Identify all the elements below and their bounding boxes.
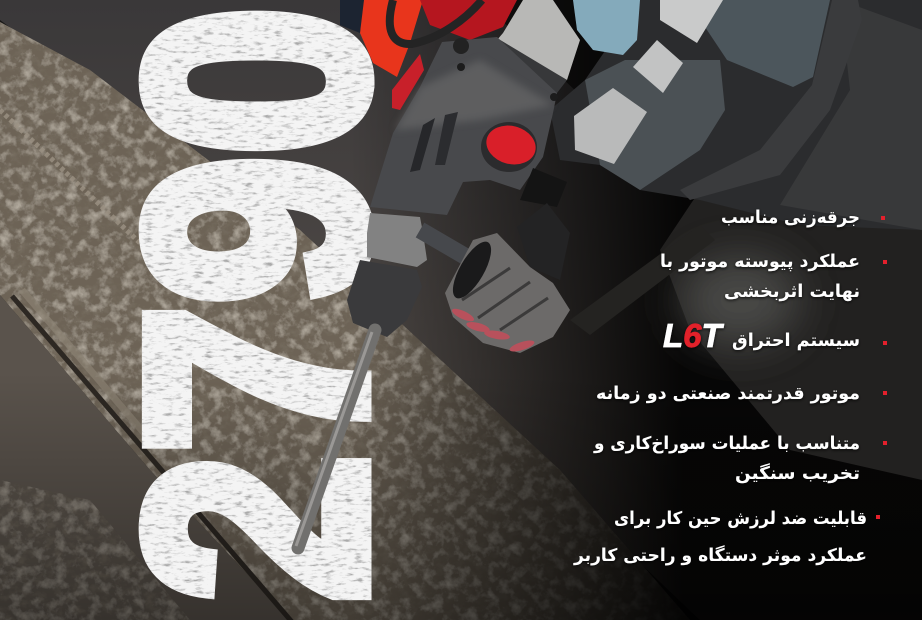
feature list (573, 208, 887, 566)
item: continuous motor performance: عملکرد پیوسته موتور با (660, 252, 860, 272)
red lever (392, 54, 424, 110)
main body (370, 37, 557, 215)
bullets (876, 216, 887, 519)
hose (390, 0, 482, 44)
item: continuous motor performance: نهایت اثربخشی (724, 282, 860, 302)
item: L6T combustion system: سیستم احتراق (732, 331, 860, 351)
chisel bit (298, 330, 375, 548)
power drill (296, 0, 640, 548)
item: drilling and demolition: متناسب با عملیات سوراخ‌کاری و (593, 434, 860, 454)
item: L6T combustion system: L6T (663, 317, 725, 354)
item: two-stroke motor: موتور قدرتمند صنعتی دو زمانه (596, 384, 860, 404)
item: continuous motor performance (660, 252, 860, 302)
item: anti-vibration: عملکرد موثر دستگاه و راحتی کاربر (573, 545, 867, 566)
motor housing (497, 0, 580, 80)
big rotated model number: 2790 (82, 6, 430, 603)
item: L6T combustion system (663, 317, 860, 354)
blue pack (573, 0, 640, 55)
right side dark background: worker clothing (550, 0, 922, 480)
item: drilling and demolition (593, 434, 860, 484)
item: suitable rotation: جرقه‌زنی مناسب (721, 208, 860, 228)
red cap (481, 120, 540, 172)
side handle (420, 230, 468, 258)
item: anti-vibration: قابلیت ضد لرزش حین کار برای (614, 509, 867, 529)
red jacket (360, 0, 423, 77)
wrist and glove (520, 168, 567, 207)
collar and chuck (367, 213, 427, 267)
item: drilling and demolition: تخریب سنگین (735, 463, 860, 484)
item: anti-vibration (573, 509, 867, 566)
